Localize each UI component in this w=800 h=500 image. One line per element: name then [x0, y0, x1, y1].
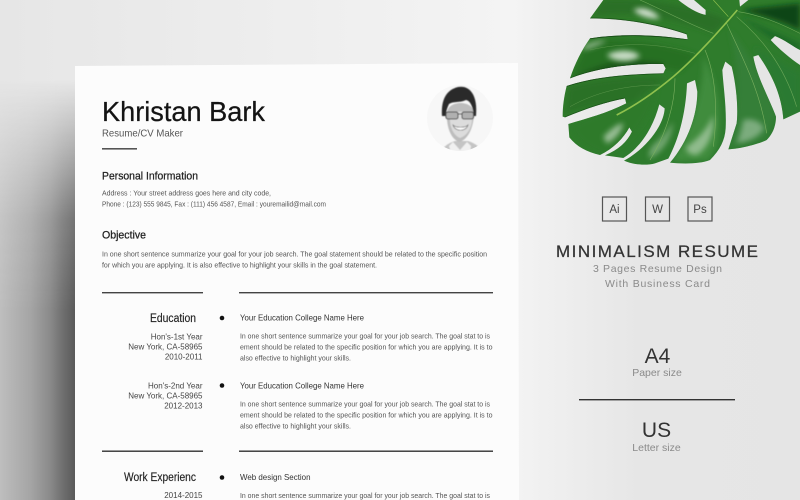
name heading: Khristan Bark [102, 96, 266, 127]
education entry 2 description: Your Education College Name Here [240, 382, 364, 390]
product subtitle: With Business Card [605, 278, 710, 290]
work entry [240, 473, 490, 500]
objective section: Objective [102, 230, 146, 242]
timeline dot [220, 316, 224, 320]
education entry 1 details: 2010-2011 [165, 352, 203, 362]
icon: Ps badge [688, 197, 712, 221]
education entry 2 description: In one short sentence summarize your goal for your job search. The goal stat to is [240, 400, 490, 408]
personal information section: Address : Your street address goes here and city code, [102, 188, 271, 198]
product subtitle: 3 Pages Resume Design [593, 263, 722, 275]
leaf dark edges [565, 18, 688, 117]
paper size A4: Paper size [632, 367, 682, 379]
background [0, 0, 560, 500]
education entry 1 description: also effective to highlight your skills. [240, 354, 351, 362]
objective section [102, 230, 487, 270]
leaf highlights [583, 8, 764, 158]
objective section: In one short sentence summarize your goal for your job search. The goal statement should be related to the specific position [102, 250, 487, 258]
education entry 2 details: Hon's-2nd Year [148, 382, 203, 390]
icon: W badge [646, 197, 670, 221]
personal information section: Personal Information [102, 170, 198, 182]
education entry 1 description: In one short sentence summarize your goal for your job search. The goal stat to is [240, 332, 490, 340]
paper size A4 [632, 345, 682, 379]
education entry 2 description: also effective to highlight your skills. [240, 422, 351, 430]
panel: product info [556, 197, 758, 454]
letter size US: Letter size [632, 442, 681, 454]
education entry 1 details: Hon's-1st Year [151, 332, 203, 342]
icon: Ai badge: Ai [609, 204, 620, 216]
work entry: Web design Section [240, 473, 311, 482]
product title: MINIMALISM RESUME [556, 242, 758, 261]
work dates: 2014-2015 [164, 491, 203, 500]
icon: Ai badge [602, 197, 626, 221]
work experience heading: Work Experienc [124, 472, 196, 484]
icon: Ps badge: Ps [693, 204, 707, 216]
portrait photo [440, 86, 478, 151]
education entry 1 details [128, 332, 203, 362]
letter size US: US [642, 419, 671, 442]
education entry 1 details: New York, CA-58965 [128, 342, 203, 352]
objective section: for which you are applying. It is also effective to highlight your skills in the goal statement. [102, 260, 377, 270]
timeline dot [220, 383, 224, 388]
leaf veins [570, 0, 800, 160]
education entry 2 details [128, 382, 203, 410]
letter size US [632, 419, 681, 454]
product subtitle [593, 263, 722, 290]
personal information section [102, 170, 326, 208]
resume paper [75, 63, 519, 500]
work rules [102, 450, 493, 452]
education entry 2 description [240, 382, 492, 430]
icon: monstera leaf [563, 0, 800, 165]
education rules [102, 292, 493, 293]
divider [579, 399, 735, 400]
icon: W badge: W [652, 204, 663, 216]
timeline dot [220, 475, 224, 480]
education entry 2 description: ement should be related to the specific position for which you are applying. It is to [240, 410, 492, 420]
education entry 2 details: New York, CA-58965 [128, 392, 203, 400]
education entry 1 description [240, 314, 492, 362]
education entry 2 details: 2012-2013 [164, 402, 203, 410]
job title: Resume/CV Maker [102, 128, 183, 140]
paper size A4: A4 [645, 345, 671, 368]
education entry 1 description: Your Education College Name Here [240, 314, 364, 322]
education entry 1 description: ement should be related to the specific position for which you are applying. It is to [240, 342, 492, 352]
personal information section: Phone : (123) 555 9845, Fax : (111) 456 4587, Email : youremailid@mail.com [102, 200, 326, 208]
education heading: Education [150, 313, 196, 325]
leaf shading [565, 0, 800, 162]
work entry: In one short sentence summarize your goal for your job search. The goal stat to is [240, 491, 490, 500]
title underline [102, 148, 137, 150]
